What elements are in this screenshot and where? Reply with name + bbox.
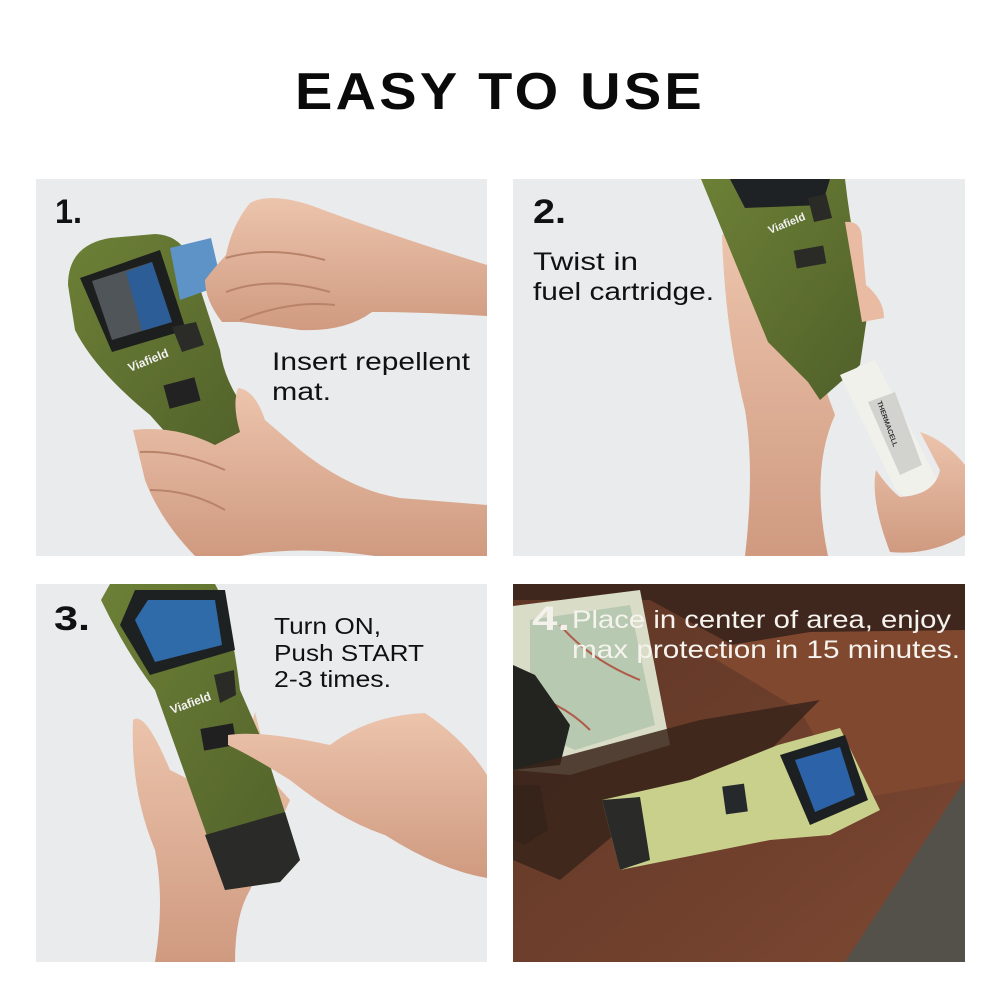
- panel: step 1: [36, 179, 487, 556]
- instruction text: Push START: [274, 640, 424, 666]
- instruction text: Twist in: [533, 248, 638, 276]
- device: repeller body: [101, 584, 300, 890]
- instruction text: 2-3 times.: [274, 666, 391, 692]
- step number: 1.: [55, 193, 82, 231]
- device: repeller upside down: [701, 179, 868, 400]
- step number: 2.: [533, 193, 566, 231]
- instruction text: mat.: [272, 378, 331, 406]
- pointing hand: [228, 713, 487, 878]
- icon: blue repellent mat: [170, 238, 222, 300]
- instruction text: max protection in 15 minutes.: [572, 636, 960, 664]
- upper hand: [205, 198, 487, 330]
- instruction text: fuel cartridge.: [533, 278, 714, 306]
- device: repeller green body: Viafield: [126, 346, 171, 375]
- device: repeller body: Viafield: [168, 689, 213, 717]
- lower hand: [133, 388, 487, 556]
- gravel corner: [845, 780, 965, 962]
- step number: 4.: [532, 600, 570, 638]
- panel: step 2: [513, 179, 965, 556]
- instruction text: Place in center of area, enjoy: [572, 606, 952, 634]
- panel: step 4: [513, 584, 965, 962]
- panel: step 3: [36, 584, 487, 962]
- device: repeller on rust table: [602, 728, 880, 870]
- fingers on device: [845, 222, 884, 322]
- instruction text: Insert repellent: [272, 348, 470, 376]
- hand holding cartridge: [875, 432, 965, 553]
- title: EASY TO USE: [295, 63, 705, 121]
- forearm and hand: [722, 232, 835, 556]
- fuel cartridge: THERMACELL: [875, 400, 898, 449]
- instruction text: Turn ON,: [274, 613, 381, 639]
- binoculars: [513, 665, 570, 770]
- step number: 3.: [54, 600, 90, 638]
- device: repeller green body: [68, 234, 240, 445]
- fuel cartridge: [840, 368, 922, 475]
- dark top background: [513, 584, 965, 645]
- holding hand: [133, 712, 290, 962]
- shadow: [513, 700, 820, 880]
- rust highlight: [700, 630, 965, 800]
- map: [513, 590, 670, 775]
- device: repeller upside down: Viafield: [767, 211, 807, 237]
